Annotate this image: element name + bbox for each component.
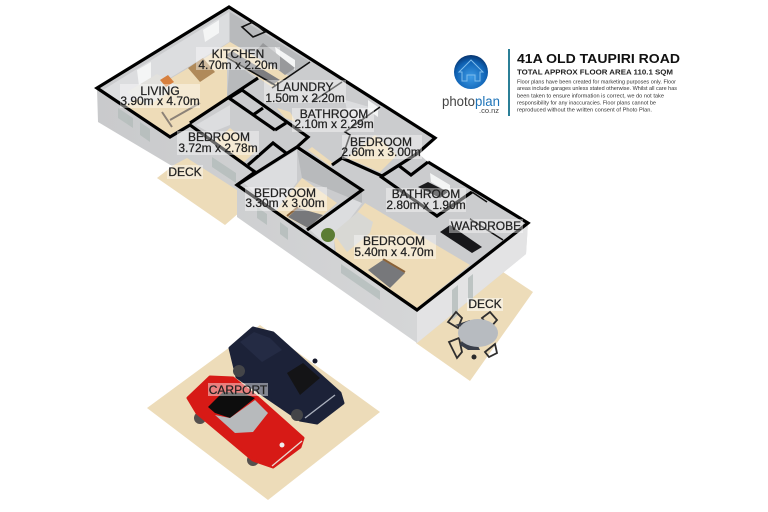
furniture: bed 3.30 (287, 207, 323, 228)
furniture: wardrobe counter (440, 225, 482, 253)
room label: wardrobe: WARDROBE (451, 219, 521, 233)
header: disclaimer (517, 80, 678, 114)
header divider (508, 49, 510, 116)
logo: wordmark: photoplan (442, 94, 500, 109)
furniture: rug lines (162, 103, 200, 127)
room label: deck right: DECK (468, 297, 502, 311)
furniture: kitchen counter (226, 51, 280, 85)
interior and exterior wall lines (97, 7, 528, 310)
furniture: living sofa (127, 74, 178, 106)
room label: bathroom 2.80: BATHROOM (392, 187, 460, 201)
wall shading (103, 12, 380, 252)
furniture: plant (321, 228, 335, 242)
room label: kitchen (196, 47, 280, 72)
room label: bathroom 2.80 (386, 187, 466, 212)
room label: bathroom 2.10 (292, 107, 374, 132)
room label: bedroom 2.60: BEDROOM (350, 135, 412, 149)
room label: bedroom 3.72 (177, 130, 259, 155)
logo: domain: .co.nz (479, 106, 499, 115)
logo: house icon (459, 60, 483, 81)
photoplan logo (442, 55, 500, 115)
dining table and chairs (448, 312, 498, 360)
furniture: dining table (188, 58, 215, 82)
header: disclaimer: reproduced without the written consent of Photo Plan. (517, 108, 652, 114)
header: disclaimer: responsibility for any inaccuracies. Floor plans cannot be (517, 100, 656, 106)
room label: deck left: DECK (168, 165, 202, 179)
room label: living (120, 84, 200, 108)
furniture: bedroom sofa (333, 212, 373, 252)
exterior walls (97, 88, 528, 343)
room label: bedroom 3.72: 3.72m x 2.78m (178, 141, 258, 155)
header: disclaimer: Floor plans have been created for marketing purposes only. Floor (517, 80, 676, 86)
furniture: bathroom sink (418, 182, 448, 198)
room label: bedroom 5.40: BEDROOM (363, 234, 425, 248)
windows (137, 20, 450, 193)
room label: bedroom 3.72: BEDROOM (188, 130, 250, 144)
room label: bedroom 5.40 (354, 234, 436, 259)
room label: bedroom 5.40: 5.40m x 4.70m (354, 245, 434, 259)
room label: bedroom 3.30 (245, 186, 327, 211)
interior shell (97, 7, 528, 310)
logo: blue circle (454, 55, 488, 89)
furniture: kitchen bench (255, 43, 295, 75)
room label: kitchen: KITCHEN (212, 47, 264, 61)
room label: bedroom 3.30: 3.30m x 3.00m (245, 196, 325, 210)
room label: laundry: 1.50m x 2.20m (265, 91, 345, 105)
exterior windows (118, 108, 473, 320)
room floors (124, 42, 470, 308)
room label: living: LIVING (140, 84, 180, 98)
header: address title: 41A OLD TAUPIRI ROAD (517, 51, 680, 66)
deck: right (416, 272, 533, 381)
header: floor area: TOTAL APPROX FLOOR AREA 110.1 SQM (517, 68, 673, 76)
navy car (230, 328, 343, 423)
furniture: bed 5.40 (368, 259, 405, 288)
room label: living: 3.90m x 4.70m (120, 94, 200, 108)
room label: bathroom 2.10: BATHROOM (300, 107, 368, 121)
deck: left (157, 155, 240, 225)
room label: bedroom 3.30: BEDROOM (254, 186, 316, 200)
room label: bedroom 2.60 (341, 135, 422, 159)
room label: kitchen: 4.70m x 2.20m (198, 58, 278, 72)
room label: laundry: LAUNDRY (276, 80, 334, 94)
header: disclaimer: been taken to ensure information is correct, we do not take (517, 94, 664, 100)
exterior wall right face (417, 223, 528, 343)
room label: bathroom 2.10: 2.10m x 2.29m (294, 117, 374, 131)
red car (188, 377, 303, 467)
header: disclaimer: areas include garages unless stated otherwise. Whilst all care has (517, 86, 678, 92)
room label: bathroom 2.80: 2.80m x 1.90m (386, 198, 466, 212)
floor plan (97, 7, 528, 343)
room label: laundry (264, 80, 346, 105)
carport slab (147, 325, 380, 500)
room label: bedroom 2.60: 2.60m x 3.00m (341, 145, 421, 159)
room label: carport: CARPORT (209, 383, 268, 397)
